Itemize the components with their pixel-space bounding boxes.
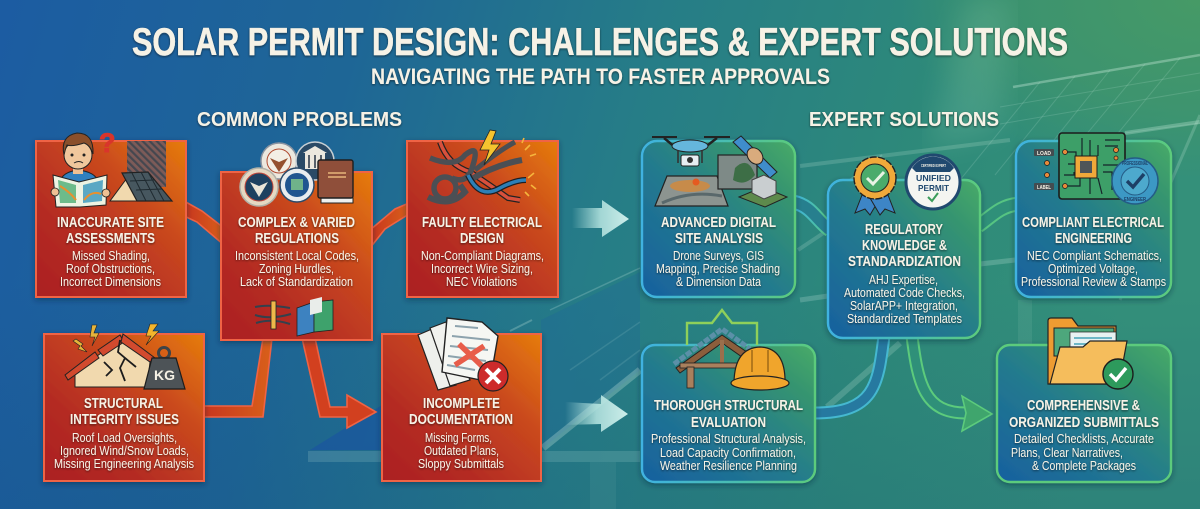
icon: tangled wires and binder (255, 297, 333, 336)
text: structural integrity issues: Roof Load Oversights, (72, 431, 177, 445)
text: comprehensive and organized submittals: ORGANIZED SUBMITTALS (1009, 415, 1159, 431)
text: faulty electrical design (421, 215, 544, 289)
icon: tangled cables with spark (428, 130, 536, 201)
text: thorough structural evaluation (651, 398, 806, 473)
panel: compliant electrical engineering (1016, 133, 1171, 297)
heading: expert solutions: EXPERT SOLUTIONS (809, 108, 999, 131)
connectors: problems (184, 201, 409, 417)
text: incomplete documentation: Outdated Plans, (424, 444, 499, 458)
arrow: problems to solutions lower (565, 395, 628, 432)
text: regulatory knowledge and standardization (844, 222, 965, 326)
text: structural integrity issues: STRUCTURAL (84, 396, 163, 412)
text: faulty electrical design: DESIGN (460, 231, 504, 247)
panel: incomplete documentation (382, 318, 541, 481)
text: faulty electrical design: Non-Compliant Diagrams, (421, 249, 544, 263)
icon: confused person with map and roof: ? (99, 128, 116, 158)
panel: inaccurate site assessments (36, 128, 186, 297)
subtitle: NAVIGATING THE PATH TO FASTER APPROVALS (371, 64, 830, 89)
text: compliant electrical engineering: COMPLIANT ELECTRICAL (1022, 215, 1164, 231)
text: incomplete documentation: DOCUMENTATION (409, 412, 513, 428)
icon: documents with red cross (418, 318, 508, 391)
text: compliant electrical engineering (1021, 215, 1166, 289)
text: regulatory knowledge and standardization: Standardized Templates (847, 312, 962, 326)
text: advanced digital site analysis: SITE ANALYSIS (675, 231, 763, 247)
text: advanced digital site analysis: & Dimension Data (676, 275, 761, 289)
text: complex and varied regulations: Inconsistent Local Codes, (235, 249, 359, 263)
text: faulty electrical design: FAULTY ELECTRICAL (422, 215, 542, 231)
text: faulty electrical design: NEC Violations (446, 275, 517, 289)
panel: complex and varied regulations (221, 142, 372, 340)
text: complex and varied regulations: REGULATIONS (255, 231, 339, 247)
text: compliant electrical engineering: Optimized Voltage, (1048, 262, 1138, 276)
arrow: regulatory to comprehensive submittals (912, 336, 992, 431)
text: advanced digital site analysis: ADVANCED DIGITAL (661, 215, 776, 231)
text: incomplete documentation: Sloppy Submittals (418, 457, 504, 471)
icon: circuit board and engineer stamp: ENGINEER (1124, 197, 1146, 203)
text: compliant electrical engineering: Professional Review & Stamps (1021, 275, 1166, 289)
arrow: regulations to incomplete documentation (302, 338, 376, 428)
text: compliant electrical engineering: NEC Compliant Schematics, (1027, 249, 1162, 263)
text: comprehensive and organized submittals (1009, 398, 1159, 473)
text: thorough structural evaluation: Weather Resilience Planning (660, 459, 797, 473)
text: regulatory knowledge and standardization: REGULATORY (865, 222, 943, 238)
panel: structural integrity issues (44, 324, 204, 481)
text: structural integrity issues: INTEGRITY ISSUES (70, 412, 179, 428)
text: incomplete documentation: INCOMPLETE (423, 396, 500, 412)
text: regulatory knowledge and standardization: KNOWLEDGE & (862, 238, 947, 254)
text: structural integrity issues (54, 396, 194, 471)
text: regulatory knowledge and standardization: Automated Code Checks, (844, 286, 965, 300)
text: advanced digital site analysis (656, 215, 780, 289)
text: inaccurate site assessments: Incorrect Dimensions (60, 275, 161, 289)
text: inaccurate site assessments: ASSESSMENTS (66, 231, 155, 247)
icon: circuit board and engineer stamp: LABEL (1037, 185, 1051, 191)
icon: circuit board and engineer stamp: PROFESSIONAL (1122, 161, 1148, 167)
text: compliant electrical engineering: ENGINEERING (1055, 231, 1132, 247)
icon: rosette and unified permit badge: UNIFIED (916, 173, 951, 183)
icon: rosette and unified permit badge: CERTIFIED EXPERT (921, 163, 946, 168)
icon: circuit board and engineer stamp (1034, 133, 1158, 204)
panel: faulty electrical design (407, 130, 558, 297)
icon: roof truss and hard hat (674, 310, 789, 390)
text: faulty electrical design: Incorrect Wire Sizing, (431, 262, 533, 276)
panel: advanced digital site analysis (642, 136, 795, 297)
text: regulatory knowledge and standardization: SolarAPP+ Integration, (850, 299, 958, 313)
icon: cracked roof and weight: KG (154, 367, 175, 383)
arrow: problems to solutions upper (572, 200, 629, 237)
text: regulatory knowledge and standardization: STANDARDIZATION (848, 254, 961, 270)
text: comprehensive and organized submittals: Detailed Checklists, Accurate (1014, 432, 1154, 446)
text: structural integrity issues: Missing Engineering Analysis (54, 457, 194, 471)
icon: rosette and unified permit badge: PERMIT (918, 183, 950, 193)
text: thorough structural evaluation: EVALUATION (691, 415, 766, 431)
text: inaccurate site assessments: Roof Obstructions, (66, 262, 155, 276)
text: complex and varied regulations: COMPLEX & VARIED (238, 215, 355, 231)
text: inaccurate site assessments (57, 215, 164, 289)
text: inaccurate site assessments: Missed Shading, (72, 249, 150, 263)
text: incomplete documentation: Missing Forms, (425, 431, 492, 445)
icon: cracked roof and weight (65, 324, 185, 389)
icon: folder with check mark (1048, 318, 1133, 389)
icon: confused person with map and roof (51, 128, 172, 207)
text: thorough structural evaluation: THOROUGH STRUCTURAL (654, 398, 803, 414)
panel: regulatory knowledge and standardization (828, 155, 980, 338)
text: regulatory knowledge and standardization: AHJ Expertise, (869, 273, 938, 287)
text: comprehensive and organized submittals: COMPREHENSIVE & (1027, 398, 1140, 414)
panel: comprehensive and organized submittals (997, 318, 1171, 482)
text: advanced digital site analysis: Drone Surveys, GIS (673, 249, 764, 263)
text: thorough structural evaluation: Professional Structural Analysis, (651, 432, 806, 446)
text: comprehensive and organized submittals: & Complete Packages (1032, 459, 1136, 473)
text: incomplete documentation (409, 396, 513, 471)
panel: thorough structural evaluation (642, 310, 815, 482)
text: advanced digital site analysis: Mapping, Precise Shading (656, 262, 780, 276)
text: thorough structural evaluation: Load Capacity Confirmation, (660, 446, 796, 460)
icon: official seals and code book (240, 142, 353, 206)
text: comprehensive and organized submittals: Plans, Clear Narratives, (1011, 446, 1123, 460)
text: structural integrity issues: Ignored Wind/Snow Loads, (60, 444, 189, 458)
heading: common problems: COMMON PROBLEMS (197, 108, 402, 131)
icon: circuit board and engineer stamp: LOAD (1037, 151, 1051, 157)
text: complex and varied regulations: Lack of Standardization (240, 275, 353, 289)
icon: drone, maps, satellite and building (652, 136, 787, 207)
connectors: solutions (793, 202, 1018, 413)
text: inaccurate site assessments: INACCURATE SITE (57, 215, 164, 231)
icon: rosette and unified permit badge (854, 155, 960, 215)
text: complex and varied regulations (235, 215, 359, 289)
text: complex and varied regulations: Zoning Hurdles, (259, 262, 334, 276)
